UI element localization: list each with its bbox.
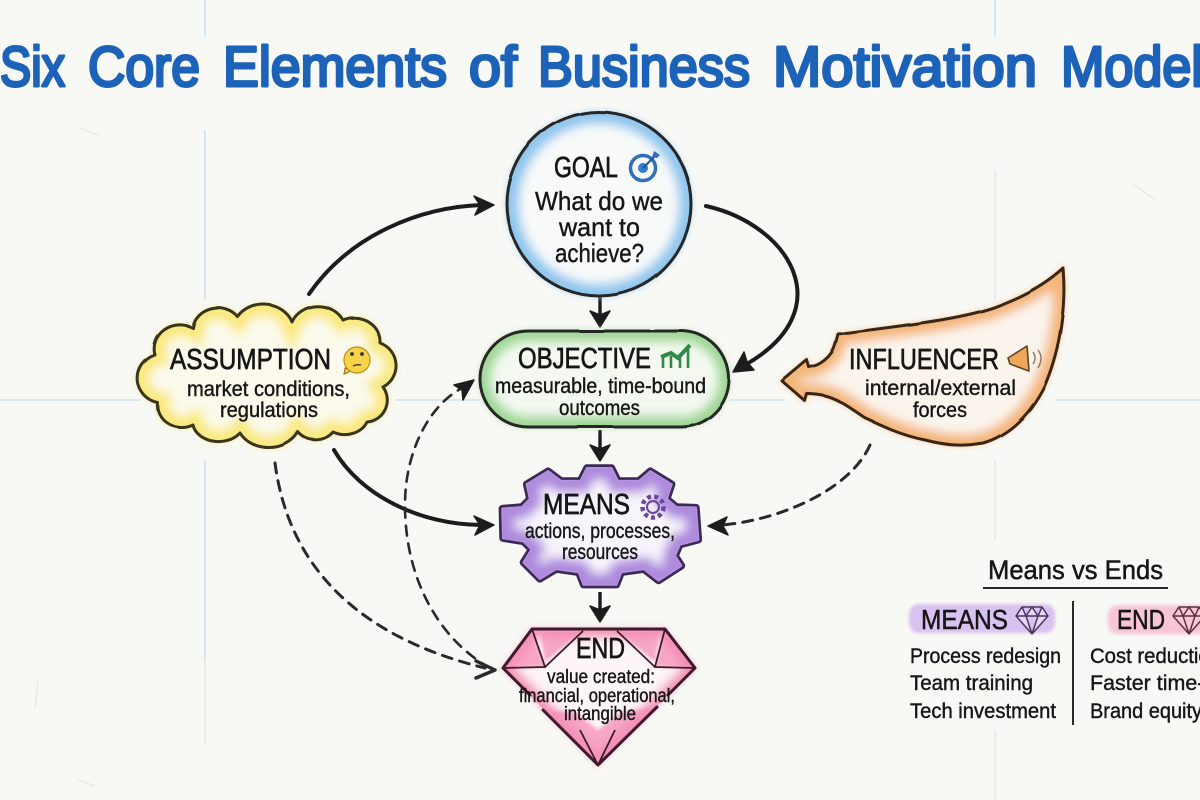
goal circle [507, 112, 691, 296]
objective description [495, 375, 706, 420]
means description [525, 520, 675, 564]
means list: Tech investment [910, 700, 1056, 723]
means label: MEANS [921, 604, 1008, 635]
title: Motivation [773, 35, 1037, 99]
arrow: assumption to end (dashed) [275, 463, 495, 678]
panel: means vs ends comparison [909, 555, 1200, 725]
panel: influencer [782, 268, 1064, 445]
arrow: objective down to means [590, 430, 610, 461]
assumption description: market conditions, [187, 378, 350, 401]
arrow: goal to objective [706, 206, 797, 372]
end highlight [1108, 605, 1200, 634]
means description: resources [562, 541, 638, 564]
icon: target [630, 151, 660, 180]
goal description: What do we [535, 186, 663, 216]
title: Core [88, 35, 200, 99]
title: of [469, 35, 517, 99]
end diamond [503, 629, 695, 765]
end description: financial, operational, [519, 686, 675, 707]
means list [910, 645, 1061, 723]
arrow: end to objective (dashed) [405, 380, 490, 668]
icon: means diamond [1016, 607, 1048, 634]
influencer description: internal/external [865, 377, 1016, 400]
assumption heading: ASSUMPTION [170, 344, 331, 376]
end heading: END [576, 633, 625, 665]
means heading: MEANS [543, 489, 630, 521]
icon: megaphone [1008, 346, 1041, 371]
arrow: assumption to means [334, 450, 494, 535]
icon: thinking face [344, 347, 370, 374]
panel: assumption [138, 304, 396, 448]
influencer heading: INFLUENCER [849, 344, 999, 376]
assumption description [187, 378, 350, 422]
end description: intangible [564, 704, 636, 725]
means description: actions, processes, [525, 520, 675, 543]
panel: means [502, 468, 698, 584]
end description [519, 667, 675, 725]
panel: goal [507, 112, 691, 296]
icon: growth chart [661, 345, 690, 368]
title [0, 35, 1200, 99]
objective description: measurable, time-bound [495, 375, 706, 398]
title: Business [538, 35, 750, 99]
arrow: goal down to objective [590, 297, 610, 327]
arrow: influencer to means (dashed) [708, 445, 870, 535]
means highlight [909, 604, 1055, 633]
influencer description [865, 377, 1016, 422]
goal heading: GOAL [554, 152, 618, 184]
paper smudges [35, 128, 1155, 786]
means list: Team training [910, 672, 1033, 695]
goal description: achieve? [555, 238, 644, 268]
title: Six [0, 35, 65, 99]
objective pill [480, 331, 729, 427]
arrow: assumption to goal [309, 196, 494, 294]
icon: end diamond [1173, 607, 1200, 634]
end description: value created: [547, 667, 655, 688]
objective description: outcomes [559, 397, 640, 420]
comparison heading: Means vs Ends [988, 555, 1163, 585]
means list: Process redesign [910, 645, 1061, 668]
goal description: want to [558, 212, 640, 242]
assumption description: regulations [220, 399, 318, 422]
icon: gear [642, 496, 664, 518]
means gear shape [502, 468, 698, 584]
goal description [535, 186, 663, 268]
influencer description: forces [913, 399, 967, 422]
objective heading: OBJECTIVE [518, 343, 651, 375]
panel: objective [480, 331, 729, 427]
assumption cloud [138, 304, 396, 448]
panel: end [503, 629, 695, 765]
title: Elements [223, 35, 447, 99]
end label: END [1117, 604, 1165, 635]
arrow: means down to end [590, 592, 610, 622]
end list [1090, 645, 1200, 723]
influencer arrow-leaf shape [782, 268, 1064, 445]
